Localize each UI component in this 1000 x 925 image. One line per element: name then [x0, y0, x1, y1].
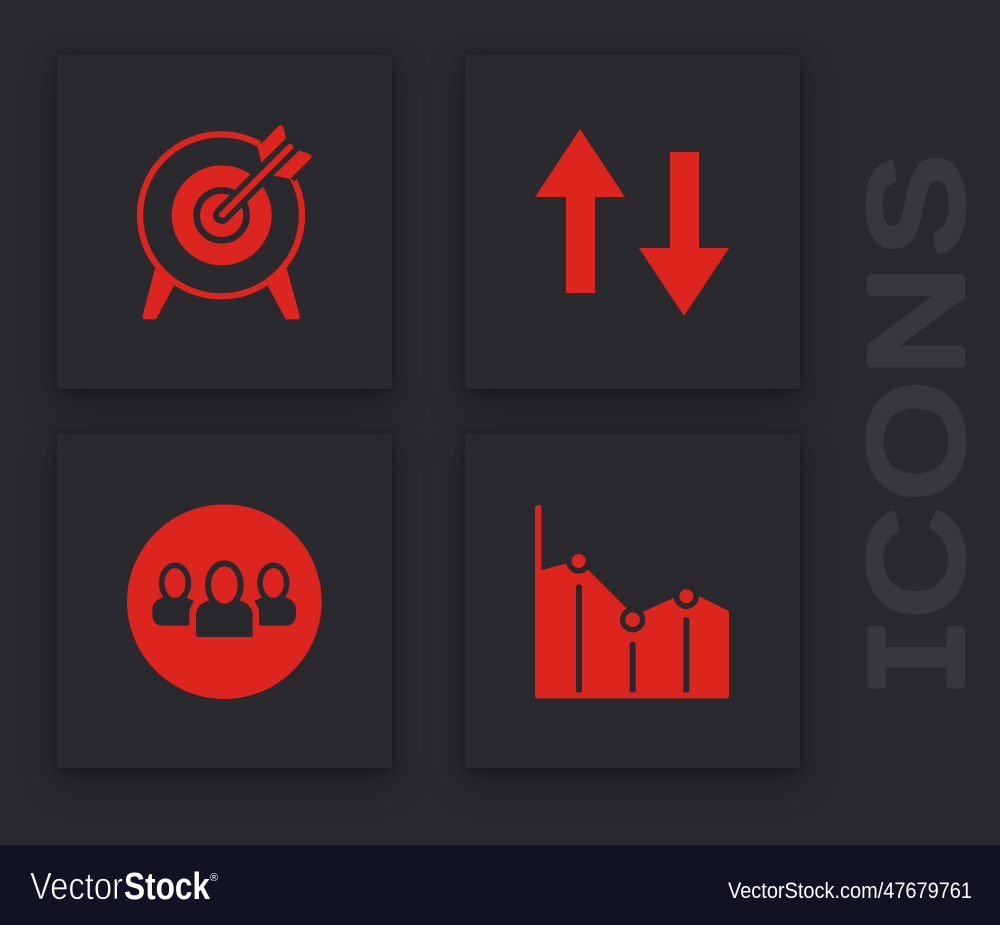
panel: chart card: [465, 434, 800, 768]
icon: target with arrow: [140, 120, 323, 319]
icon: people in circle: [127, 504, 322, 699]
vertical ICONS watermark: O: [842, 382, 989, 500]
footer band: [0, 845, 1000, 925]
image id text: VectorStock.com/47679761: [728, 878, 972, 903]
vertical ICONS watermark: C: [842, 509, 989, 618]
icon: area chart with markers: [535, 505, 729, 698]
vertical ICONS watermark: I: [848, 616, 1000, 698]
vertical ICONS watermark: S: [842, 156, 989, 256]
logo: VectorStock: Vector: [30, 866, 123, 908]
logo: VectorStock: [30, 866, 218, 908]
panel: people card: [57, 434, 392, 768]
panel: target card: [57, 55, 392, 389]
logo: VectorStock: ®: [210, 872, 218, 884]
logo: VectorStock: Stock: [124, 866, 211, 908]
icon: up and down arrows: [535, 129, 729, 316]
panel: arrows card: [465, 55, 800, 389]
vertical ICONS watermark: [842, 156, 1000, 698]
vertical ICONS watermark: N: [842, 266, 989, 375]
